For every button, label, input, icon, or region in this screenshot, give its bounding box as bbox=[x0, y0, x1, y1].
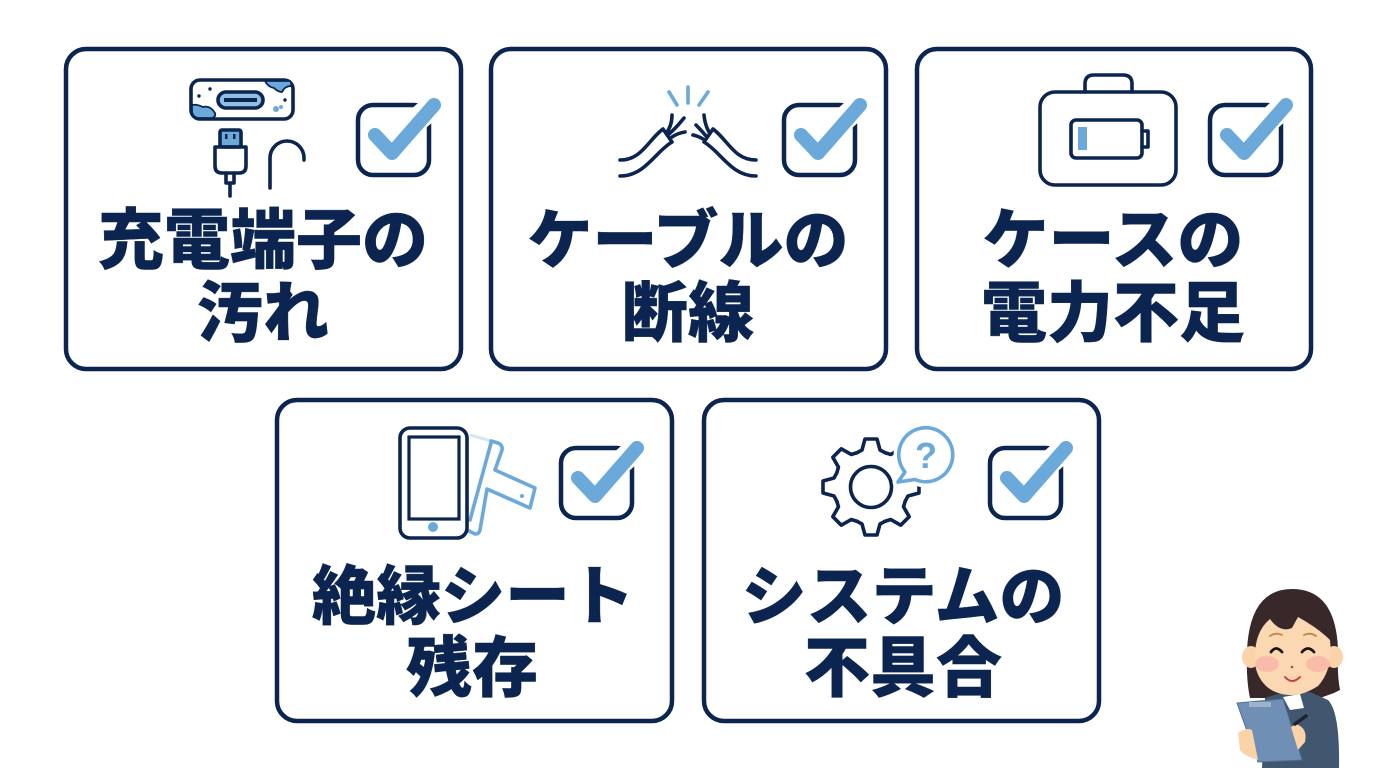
panel: system fault bbox=[704, 400, 1099, 721]
icon: gear with question bubble bbox=[823, 428, 953, 535]
icon: dirty charging port and cable bbox=[191, 80, 304, 196]
heading line 2: 汚れ bbox=[197, 276, 329, 350]
icon: gear with question bubble: ? bbox=[915, 435, 937, 476]
heading line 2: 断線 bbox=[622, 276, 754, 350]
icon: checkbox checked bbox=[358, 105, 434, 175]
heading: insulation sheet: 絶縁シート bbox=[312, 561, 634, 633]
heading: charging port dirt: 充電端子の bbox=[98, 203, 428, 277]
icon: checkbox checked bbox=[1210, 105, 1286, 175]
icon: charging case with low battery bbox=[1040, 75, 1176, 185]
icon: checkbox checked bbox=[990, 448, 1066, 518]
heading line 2: 不具合 bbox=[804, 631, 1002, 705]
panel: insulation sheet remaining bbox=[277, 400, 672, 721]
icon: broken cable bbox=[620, 87, 756, 176]
heading: cable break: ケーブルの bbox=[527, 204, 849, 277]
icon: phone and insulation sheet bbox=[400, 428, 535, 538]
panel: broken cable bbox=[491, 49, 886, 369]
panel: case low power bbox=[917, 49, 1311, 369]
icon: checkbox checked bbox=[561, 448, 637, 518]
heading: case power: ケースの bbox=[983, 203, 1243, 277]
icon: checkbox checked bbox=[784, 105, 860, 175]
heading: system: システムの bbox=[741, 560, 1065, 633]
heading line 2: 残存 bbox=[406, 631, 538, 705]
heading line 2: 電力不足 bbox=[981, 276, 1245, 350]
panel: charging port dirt bbox=[66, 49, 461, 369]
illustration: woman with clipboard bbox=[1237, 589, 1343, 768]
